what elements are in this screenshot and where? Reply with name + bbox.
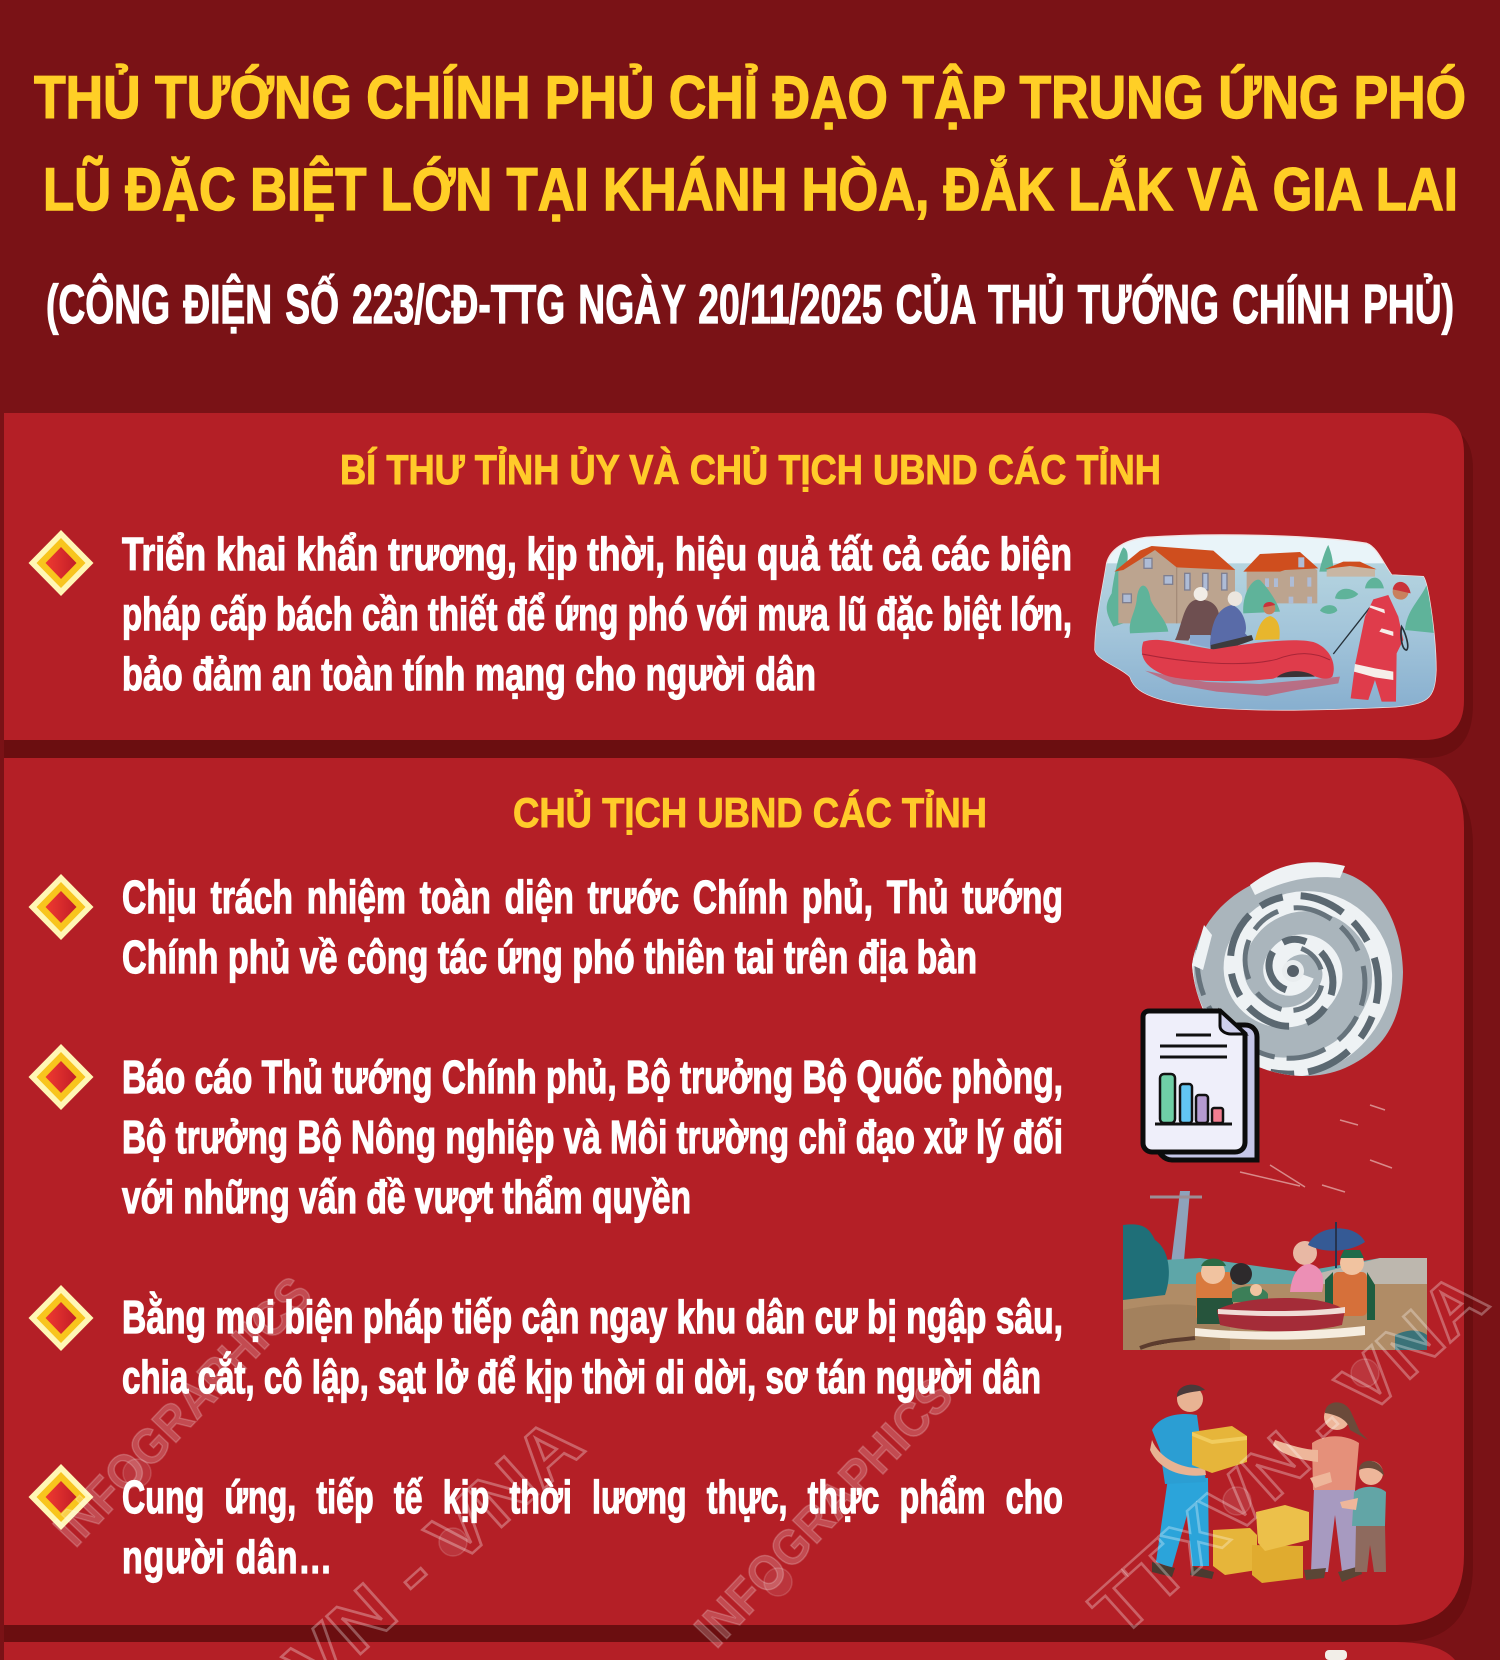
icon: diamond bullet — [28, 530, 94, 596]
text block: responsibility — [122, 871, 1063, 983]
icon: report document — [1143, 1011, 1257, 1160]
text block: reporting — [122, 1051, 1063, 1223]
text block: supplies — [122, 1471, 1063, 1583]
inflatable boat — [1142, 640, 1334, 681]
man with box — [1156, 1478, 1209, 1568]
icon: diamond bullet 2 — [28, 1044, 94, 1110]
text block: panel 1 body: bảo đảm an toàn tính mạng cho người dân — [122, 648, 816, 700]
illustration: flood rescue by soldiers — [1123, 1105, 1427, 1350]
text block: supplies: người dân… — [122, 1531, 333, 1583]
icon: diamond bullet 4 — [28, 1464, 94, 1530]
illustration: rescue boat in flood — [1093, 535, 1440, 717]
text block: supplies: Cung ứng, tiếp tế kịp thời lương thực, thực phẩm cho — [122, 1471, 1063, 1523]
illustration: food relief to families — [1150, 1385, 1386, 1583]
text block: access and evacuation: chia cắt, cô lập, sạt lở để kịp thời di dời, sơ tán người dân — [122, 1351, 1041, 1403]
text block: responsibility: Chịu trách nhiệm toàn diện trước Chính phủ, Thủ tướng — [122, 871, 1063, 923]
text block: reporting: với những vấn đề vượt thẩm quyền — [122, 1171, 691, 1223]
rescuer — [1351, 595, 1403, 702]
text block: access and evacuation — [122, 1291, 1063, 1403]
text block: responsibility: Chính phủ về công tác ứng phó thiên tai trên địa bàn — [122, 931, 977, 983]
text block: reporting: Báo cáo Thủ tướng Chính phủ, Bộ trưởng Bộ Quốc phòng, — [122, 1051, 1063, 1103]
heading: panel 1: BÍ THƯ TỈNH ỦY VÀ CHỦ TỊCH UBND CÁC TỈNH — [340, 445, 1161, 493]
panel: provincial secretaries and chairmen — [4, 413, 1464, 740]
watermark: agency logos: TTXVN - VNA — [1075, 1256, 1500, 1652]
watermark: agency logos: INFOGRAPHICS — [685, 1368, 964, 1658]
cardboard boxes — [1213, 1528, 1257, 1575]
icon: diamond bullet 3 — [28, 1285, 94, 1351]
watermark: agency logos — [44, 1256, 1500, 1660]
panel: next section top edge — [4, 1642, 1455, 1660]
text block: access and evacuation: Bằng mọi biện pháp tiếp cận ngay khu dân cư bị ngập sâu, — [122, 1291, 1063, 1343]
heading: panel 2: CHỦ TỊCH UBND CÁC TỈNH — [513, 788, 987, 836]
text block: panel 1 body — [122, 528, 1072, 700]
passengers — [1175, 600, 1219, 641]
text block: panel 1 body: Triển khai khẩn trương, kịp thời, hiệu quả tất cả các biện — [122, 528, 1072, 580]
panel: provincial chairmen — [4, 758, 1500, 1660]
illustration: cyclone — [1192, 862, 1403, 1076]
child — [1355, 1525, 1386, 1572]
panel shadows — [4, 425, 1473, 1642]
title — [34, 64, 1466, 223]
text block: reporting: Bộ trưởng Bộ Nông nghiệp và Môi trường chỉ đạo xử lý đối — [122, 1111, 1063, 1163]
watermark: agency logos: INFOGRAPHICS — [44, 1267, 323, 1557]
text block: panel 1 body: pháp cấp bách cần thiết để ứng phó với mưa lũ đặc biệt lớn, — [122, 588, 1072, 640]
woman — [1311, 1488, 1358, 1572]
icon: diamond bullet 1 — [28, 874, 94, 940]
